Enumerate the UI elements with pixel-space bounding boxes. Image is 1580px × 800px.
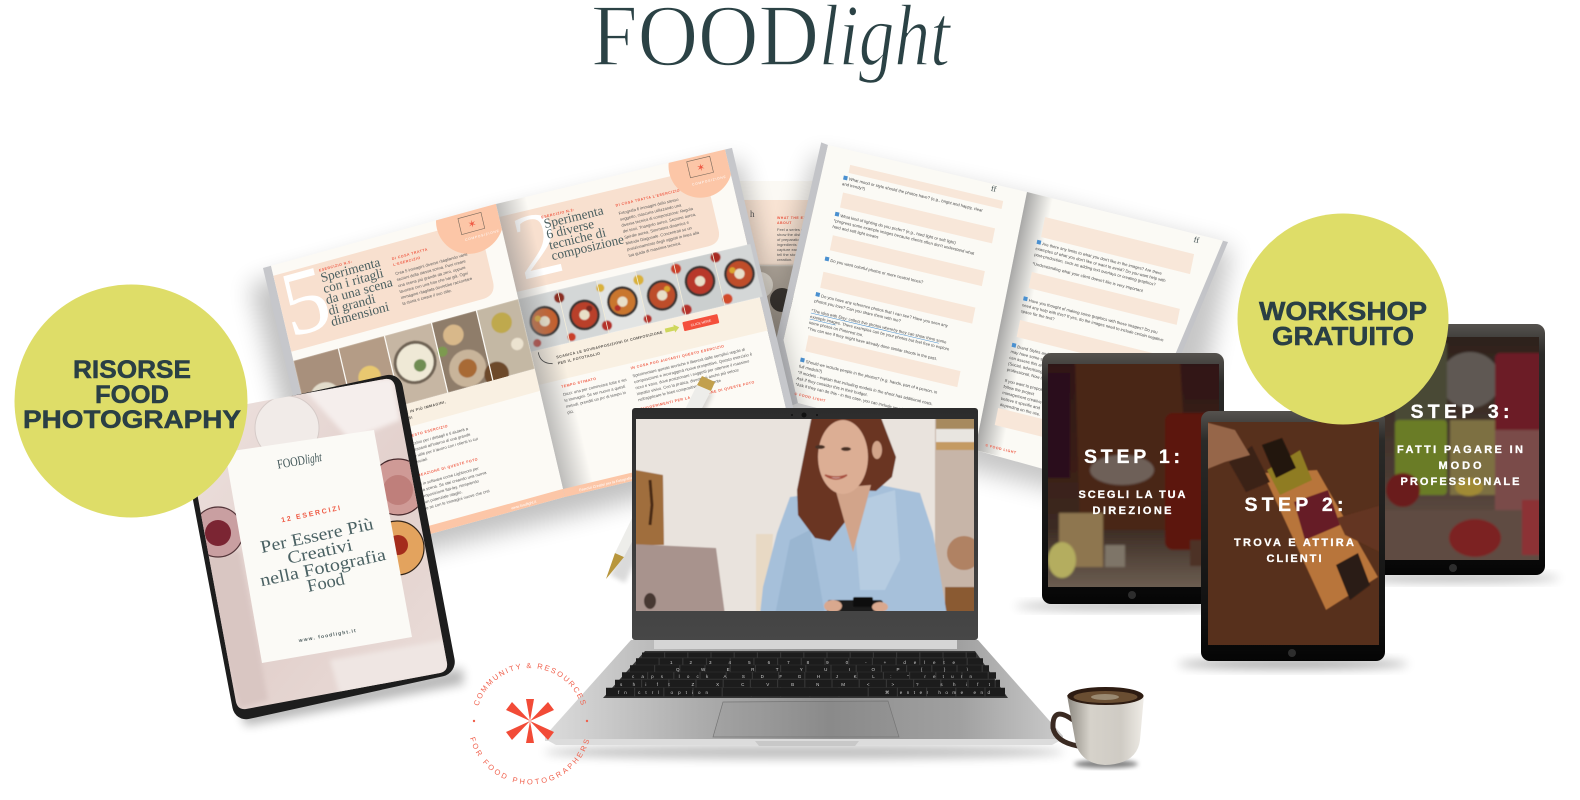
left page: esercizio 5: sezioni della stessa scena. Puoi creare [396,258,467,282]
right questionnaire page: Have you thought of making some graphics with these images? Do you [1028,298,1159,335]
right page: esercizio 2: TEMPO STIMATO [561,377,597,389]
right page: esercizio 2: nell'applicare le linee compositive rapidamente [638,378,722,402]
photo strip: food crops [294,299,534,404]
right page: esercizio 2: Sperimentare queste tecniche ti libererà dalle semplici regole di [632,347,745,378]
right page: esercizio 2: SUGGERIMENTI PER LA CREAZIONE DI QUESTE FOTO [640,380,755,411]
right page: esercizio 2: Esercizi Creativi per la Fotografia [579,476,634,492]
left page: esercizio 5: narrazione e dettaglio sono essenziali. [360,456,428,480]
circle badge: workshop gratuito [1238,214,1448,424]
left page: esercizio 5: E DETTAGLIATE L'IMMAGINE ORIGINALE IN PIÙ IMMAGINI, [323,399,446,437]
left questionnaire page: hard and soft light means [832,224,879,240]
right page: esercizio 2: Metodo Diagonale. Concentrati su un [625,225,693,246]
right questionnaire page: (Social, advertising) [1008,361,1045,375]
left page: esercizio 5: ✶ [467,218,478,231]
card url: www. foodlight.it [297,628,357,644]
tablet: step 2: TROVA E ATTIRA [1234,537,1354,549]
tablet: step 2: STEP 2: [1244,494,1344,516]
keyboard: fn ctrl option [618,690,708,695]
shadow: laptop [544,745,1064,759]
left page: esercizio 5: CONCENTRANDOTI SU DETTAGLI DIVERSI [325,415,413,443]
right page: esercizio 2: composizione e incoraggerà nuove prospettive. Questo esercizio è [633,351,753,384]
right page: esercizio 2: posizionamento degli oggetti in linea alla [627,230,700,252]
left questionnaire page: *You can see if they might have already done similar shoots in the past. [807,326,938,361]
panel: third page behind the books [735,181,835,401]
right page: esercizio 2: COMPOSIZIONE [692,175,727,187]
left page: esercizio 5: L'ESERCIZIO [393,256,421,267]
circle badge: risorse food photography [14,284,248,518]
left questionnaire page: Should we include people in the photos? (e.g. hands, part of a person, in [805,359,938,395]
tablet: step 1: DIREZIONE [1092,505,1172,517]
right questionnaire page: © FOOD LIGHT [985,443,1017,455]
shadow: first book [250,160,810,575]
shadow: step 1 [1015,602,1245,610]
step 1 photo [1044,360,1223,591]
right page: esercizio 2: impatto visivo. Con la pratica, diventerai anche più veloce [636,367,740,396]
left questionnaire page: What mood or style should the photos have? (e.g., bright and happy, clear [848,176,984,213]
right page: esercizio 2 [491,127,801,497]
right page: esercizio 2: metodi, prenditi un po' di tempo in [565,390,627,409]
left page: esercizio 5: da una scena [324,274,394,307]
shadow: second book [765,155,1232,520]
right questionnaire page: Are there any limits to what you don't like in the images? Are there [1042,241,1163,276]
webcam [791,412,818,418]
left questionnaire page [764,141,1027,450]
right questionnaire page: follow the project [1003,384,1036,397]
left page: esercizio 5: SUGGERIMENTI PER LA CREAZIONE DI QUESTE FOTO [363,457,478,493]
panel: laptop [544,408,1064,759]
right page: esercizio 2: 6 diverse [545,216,596,242]
tablet: step 3: MODO [1438,460,1482,472]
right page: esercizio 2: ✶ [696,162,707,175]
right page: esercizio 2: Spirale aurea, Simmetria dinamica e [624,219,690,240]
shadow: step 3 [1350,574,1560,582]
button: click here: CLICK HERE [690,319,712,328]
left page: esercizio 5: dimensioni [329,299,391,329]
laptop lid bezel [632,408,978,640]
left page: esercizio 5: • Quanti esercizi! Funziona bene se con le immagini nuove che crei [370,488,490,526]
left page: esercizio 5: raccontare e a trovare aree interessanti all'interno di una grande [357,431,472,468]
photo strip: tomato bowls [518,244,763,352]
card title [258,513,388,596]
panel: third page behind the books: show the dish [777,232,801,237]
keyboard: shift Z X C V B N M < > ? shift [620,682,991,687]
right page: esercizio 2: le immagini. Se sei nuovo a questi [564,384,626,403]
right page: esercizio 2: tua guida di massima tecnica. [628,240,682,258]
icon: red asterisk [506,699,554,743]
right questionnaire page: space for the text? [1020,308,1056,322]
stamp: community and resources: COMMUNITY & RESOURCES [474,662,586,706]
card title: Creativi [285,534,354,568]
laptop base [545,640,1063,741]
circle badge: workshop gratuito: GRATUITO [1272,321,1414,351]
right questionnaire page: *Understanding what your client doesn't like is very important [1032,261,1144,293]
card title: Per Essere Più [258,513,375,557]
right page: esercizio 2: 2 [504,191,572,301]
panel: third page behind the books: ingredients [777,242,797,247]
hinge [654,640,957,649]
panel: third page behind the books: h [750,209,755,219]
right page: esercizio 2: composizione [550,231,625,263]
circle badge: risorse food photography: PHOTOGRAPHY [23,406,241,434]
right questionnaire page: may have some specific [1010,349,1055,365]
right questionnaire page: If you want to propose [1004,378,1046,393]
circle badge: risorse food photography: RISORSE [73,356,191,384]
panel: third page behind the books: capture each [777,247,800,252]
panel: third page behind the books: of preparation [777,237,802,242]
left page: esercizio 5: 5 [271,245,340,358]
left page: esercizio 5: una scena più grande da zero, oppure [398,265,467,288]
left questionnaire page: Do you have any reference photos that I can see? Have you seen any [821,293,949,328]
tablet: step 1: SCEGLI LA TUA [1078,489,1186,501]
stamp: community and resources [470,662,589,784]
left page: esercizio 5: • Utilizza lo strumento Crop Tool in software come Lightroom per [365,465,480,502]
card logo: light [304,449,323,467]
left page: esercizio 5: ESERCIZIO N.5: [319,260,353,273]
icon: coffee cup [1053,687,1144,768]
left questionnaire page: What kind of lighting do you prefer? (e.g., hard light or soft light) [840,213,957,245]
left page: esercizio 5: scena, prova a utilizzare una composizione flat-lay, riempiendo [368,478,480,514]
card eyebrow: 12 esercizi: 12 ESERCIZI [281,505,343,524]
keyboard: caps lock A S D F G H J K L : " return [632,674,972,679]
right questionnaire page: examples of what you don't like or want to avoid? Do you want help with [1035,246,1167,283]
right questionnaire page: ff [1193,235,1200,245]
right page: esercizio 2: ricco e vario, dove posizionare i soggetti per ottenere il massimo [635,358,750,390]
tablet: step 1: STEP 1: [1084,446,1180,468]
circle badge: workshop gratuito: WORKSHOP [1259,296,1427,326]
left page: esercizio 5: www.foodlight.it [511,500,537,510]
left page: esercizio 5 [263,204,565,534]
left page: esercizio 5: l'area più punti di interesse per un potenziale ritaglio. [369,489,463,520]
shadow: step 2 [1178,659,1408,669]
left page: esercizio 5: la storia e creare il suo stile. [402,288,452,306]
right questionnaire page: post-production, such as adding text overlays or creating graphics? [1034,252,1157,287]
tablet screen photo: glasses on linen [198,378,448,710]
left questionnaire page: some photos on Pinterest too. [809,320,864,338]
right page: esercizio 2: ESERCIZIO N.2: [541,208,575,219]
stamp: community and resources: FOR FOOD PHOTOGRAPHERS [470,737,589,784]
tablet: step 2: CLIENTI [1266,553,1322,565]
left questionnaire page: Ask if they consider this in their budget. [796,376,868,397]
left questionnaire page: *If models - explain that including models in the shoot has additional costs. [797,370,933,406]
right questionnaire page: can assess this and [1009,355,1046,369]
left questionnaire page: and trendy?) [842,181,866,191]
button: click here [682,314,719,331]
shadow: tablet [240,668,464,726]
right page: esercizio 2: PER IL FOTOTAGLIO [557,351,601,365]
left page: esercizio 5: lavorare con una foto che hai già. Ogni [399,270,469,294]
left questionnaire page: full models?) [799,364,823,374]
left questionnaire page: © FOOD LIGHT [794,392,826,403]
left page: esercizio 5: sperimentare diverse aree di una scena. Se stai creando una nuova [366,470,488,508]
right page: esercizio 2: dei terzi, Triangolo aureo, Sezione aurea, [622,212,697,234]
tablet: step 3: PROFESSIONALE [1400,476,1520,488]
panel: third page behind the books: WHAT THE EX [777,216,807,220]
panel: third page behind the books: tell the story [777,252,799,257]
left questionnaire page: *Ask if they can do this - in this case, you can include your budget [795,382,916,415]
left questionnaire page: *The idea with Etsy: collect five photos whereby they can show them some [811,308,948,345]
arrow: green [664,323,680,335]
right questionnaire page: Brand Styles and colours [1017,344,1063,360]
video frame: woman with camera [630,415,981,615]
keyboard: 1 2 3 4 5 6 7 8 9 0 - + delete [670,660,955,665]
right questionnaire page [974,192,1228,504]
left questionnaire page: example images. There examples can be your photos but feel free to explore [810,314,950,352]
left page: esercizio 5: COMPOSIZIONE [465,229,500,242]
logo: FOODlight [591,0,952,85]
right page: esercizio 2: Dicci: una per cominciare tutte e sei [562,377,627,397]
right page: esercizio 2: diversa tecnica di composizione: Regola [621,206,694,228]
right questionnaire page: depending on the use. [999,402,1041,417]
left page: esercizio 5: Questa sezione. [372,519,402,532]
card title: Food [305,568,347,596]
keyboard: ⌘ enter home end [885,690,990,695]
right questionnaire page: professional. Now is [1007,367,1044,381]
left page: esercizio 5: con i ritagli [322,265,385,296]
right page: esercizio 2: DI COSA TRATTA L'ESERCIZIO [615,188,680,208]
left page: esercizio 5: Crea 5 immagini diverse ritagliando varie [395,251,469,276]
panel: client questionnaire book [764,141,1228,504]
circle badge: risorse food photography: FOOD [95,381,169,409]
step 3 photo [1384,337,1539,560]
left questionnaire page: ff [990,184,997,194]
left questionnaire page: Do you want colorful photos or more neutral tones? [830,258,924,285]
tablet: step 2 [1178,411,1408,669]
right page: esercizio 2: tecniche di [547,224,608,253]
right questionnaire page: management creative [1002,390,1043,405]
keyboard [603,651,1008,698]
panel: exercises book [263,148,793,534]
left page: esercizio 5: immagine ritagliata dovrebbe raccontare [400,276,473,300]
panel: third page behind the books: Feel a series of [777,227,805,232]
arrow: curved pointer [538,350,553,366]
tablet: step 3: FATTI PAGARE IN [1397,444,1523,456]
trackpad [713,701,899,737]
right page: esercizio 2: SCARICA LE SOVRAPPOSIZIONI DI COMPOSIZIONE [556,330,663,359]
left page: esercizio 5: IN COSA PUÒ AIUTARTI QUESTO ESERCIZIO [353,423,449,454]
step 2 photo: chocolate bar [1204,418,1383,649]
left page: esercizio 5: Sperimenta [319,254,382,285]
left questionnaire page: *progress some example images because clients often don't understand what [833,218,975,256]
left questionnaire page: photos you love? Can you share them with me? [814,298,902,324]
right page: esercizio 2: Sperimenta [542,202,605,231]
card logo: FOOD [276,452,306,472]
left page: esercizio 5: DI COSA TRATTA [391,247,428,261]
panel: tablet ebook cover [170,370,464,726]
tablet: step 1 [1015,353,1245,610]
left page: esercizio 5: Questo esercizio affinerà il tuo occhio per i dettagli e ti aiuterà a [355,426,469,462]
right questionnaire page: believe it specific and [1001,396,1041,411]
keyboard: Q W E R T Y U I O P { } \ [676,667,969,672]
panel: third page behind the books: creation. [777,257,792,262]
tablet body [178,372,457,722]
icon: pen [606,376,715,583]
left page: esercizio 5: di grandi [327,291,377,318]
right page: esercizio 2: più. [567,409,574,415]
right page: esercizio 2: soggetto, ciascuna utilizzando una [619,202,682,222]
left page: esercizio 5: composizione. È particolarmente utile per il lavoro con i clienti in cui [358,436,478,474]
tablet: step 3: STEP 3: [1410,401,1510,423]
panel: third page behind the books: ABOUT [777,221,792,225]
right page: esercizio 2: IN COSA PUÒ AIUTARTI QUESTO ESERCIZIO [630,343,725,370]
right questionnaire page: need any help with this? If yes, do the images need to include certain negative [1022,302,1165,343]
card title: nella Fotografia [258,544,388,590]
ebook cover card [225,430,412,663]
tablet: step 3 [1384,324,1558,587]
right page: esercizio 2: Fotografa 6 immagini dello stesso [618,197,680,216]
